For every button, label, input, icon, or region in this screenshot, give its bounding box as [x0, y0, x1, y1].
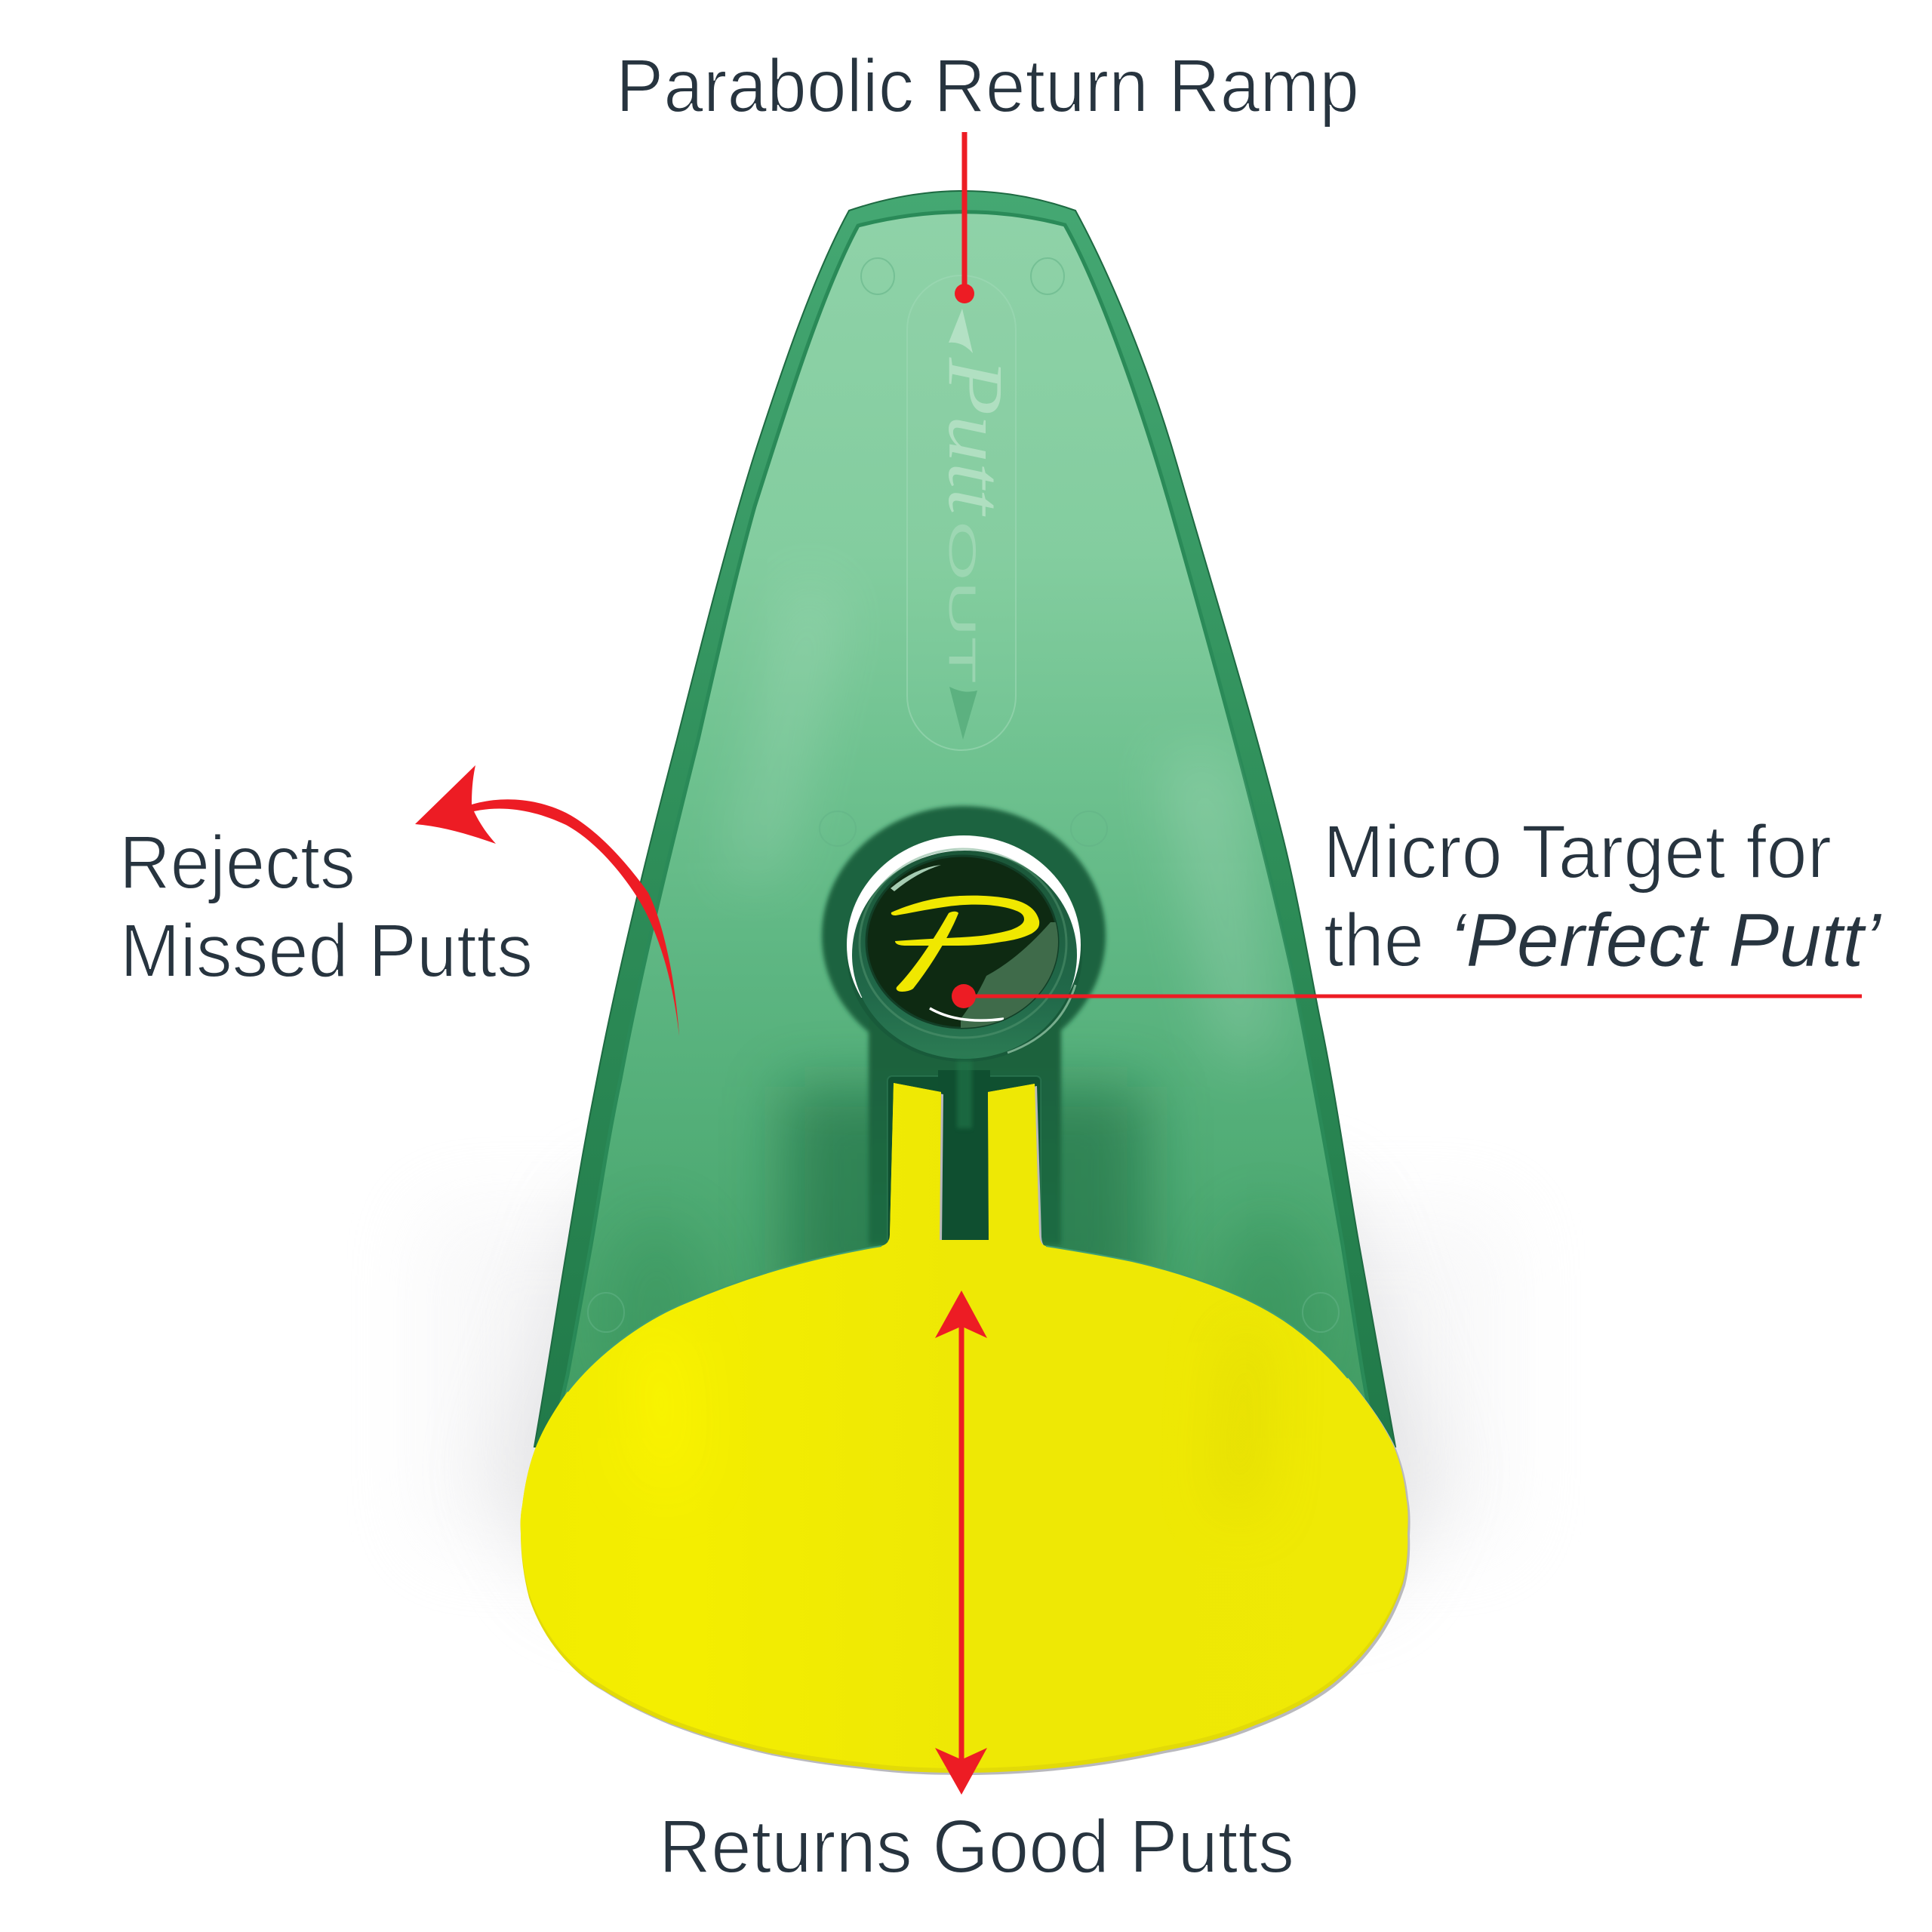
floor shadow	[423, 1192, 1509, 1592]
label: micro target: ‘Perfect Putt’	[1449, 898, 1882, 983]
black logo disc	[866, 856, 1058, 1028]
embossed PuttOUT wordmark	[932, 357, 1019, 684]
arrow: returns good putts	[935, 1291, 987, 1795]
moulded dimples	[588, 258, 1339, 1332]
pill arrow down	[949, 687, 977, 740]
embossed logo pill	[907, 275, 1019, 750]
leader line: micro target	[952, 984, 1862, 1008]
centre slot and stem frames	[888, 1060, 1041, 1242]
label: micro target: Micro Target for	[1323, 810, 1832, 894]
dark cup surround	[822, 806, 1106, 1245]
label: micro target	[1323, 810, 1882, 983]
label: returns good putts: Returns Good Putts	[659, 1804, 1294, 1889]
arrow: rejects missed putts	[415, 765, 679, 1036]
label: rejects missed putts	[119, 820, 533, 993]
white crescent	[847, 835, 1081, 998]
heading: parabolic return ramp: Parabolic Return Ramp	[616, 44, 1359, 128]
yellow ball-return ramp	[521, 1078, 1411, 1775]
label: rejects missed putts: Missed Putts	[120, 909, 533, 993]
green parabolic ramp	[534, 191, 1395, 1479]
embossed PuttOUT wordmark: Putt	[932, 357, 1019, 517]
yellow P logo	[891, 896, 1039, 992]
leader line: parabolic return ramp	[955, 132, 974, 303]
micro target cup	[822, 806, 1106, 1245]
pill arrow up	[949, 309, 973, 353]
label: micro target: the	[1324, 898, 1424, 983]
label: rejects missed putts: Rejects	[119, 820, 355, 905]
embossed PuttOUT wordmark: OUT	[941, 521, 983, 684]
